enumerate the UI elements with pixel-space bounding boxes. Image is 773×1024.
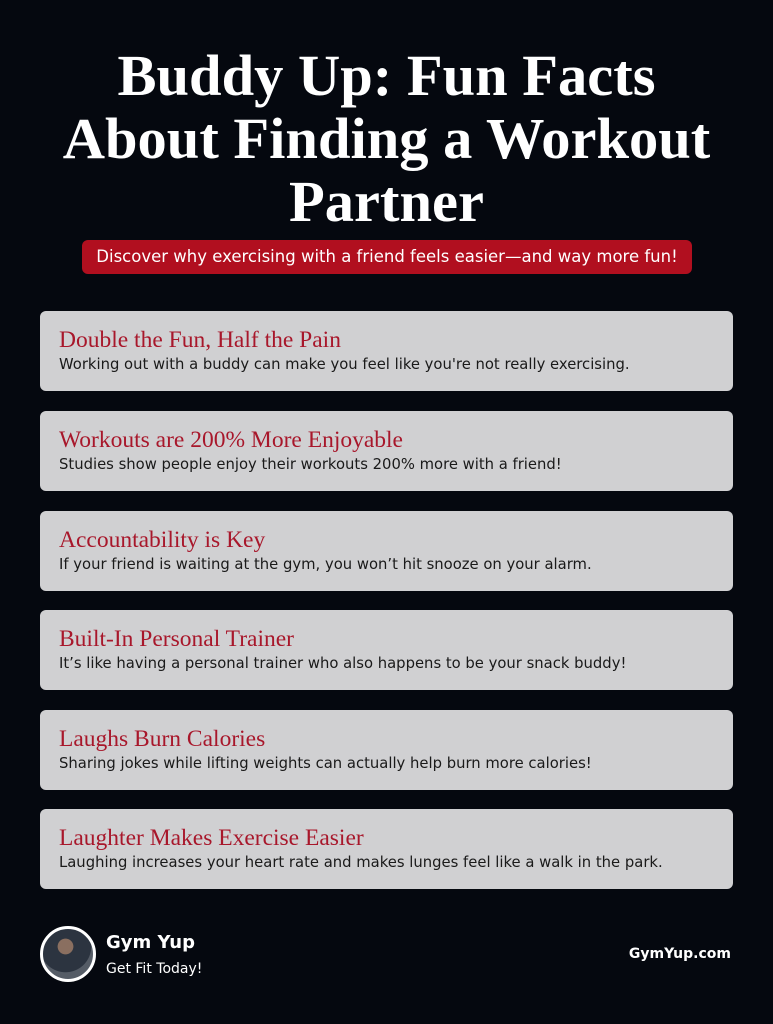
card: double the fun: Working out with a buddy can make you feel like you're not really exercising. (59, 356, 630, 373)
card: accountability: If your friend is waiting at the gym, you won’t hit snooze on your alarm. (59, 556, 592, 573)
subtitle banner (82, 240, 692, 274)
card: laughs burn calories (40, 710, 733, 790)
subtitle banner: Discover why exercising with a friend feels easier—and way more fun! (96, 247, 678, 266)
card: double the fun: Double the Fun, Half the Pain (59, 327, 341, 353)
title: Partner (289, 169, 484, 234)
card: laughter easier (40, 809, 733, 889)
card: laughter easier: Laughing increases your heart rate and makes lunges feel like a walk in the park. (59, 854, 663, 871)
title (63, 43, 710, 234)
website: GymYup.com (629, 946, 731, 962)
card: 200% more enjoyable: Workouts are 200% More Enjoyable (59, 427, 403, 453)
card: laughs burn calories: Sharing jokes while lifting weights can actually help burn more calories! (59, 755, 592, 772)
card: laughter easier: Laughter Makes Exercise Easier (59, 825, 364, 851)
icon: avatar (40, 926, 96, 982)
tagline: Get Fit Today! (106, 961, 202, 977)
card: accountability (40, 511, 733, 591)
card: personal trainer: It’s like having a personal trainer who also happens to be your snack buddy! (59, 655, 626, 672)
card: personal trainer: Built-In Personal Trainer (59, 626, 294, 652)
title: Buddy Up: Fun Facts (117, 43, 656, 108)
title: About Finding a Workout (63, 106, 710, 171)
brand name: Gym Yup (106, 932, 195, 953)
card: laughs burn calories: Laughs Burn Calories (59, 726, 265, 752)
card: double the fun (40, 311, 733, 391)
card: personal trainer (40, 610, 733, 690)
card: 200% more enjoyable: Studies show people enjoy their workouts 200% more with a friend! (59, 456, 562, 473)
card: 200% more enjoyable (40, 411, 733, 491)
card: accountability: Accountability is Key (59, 527, 265, 553)
